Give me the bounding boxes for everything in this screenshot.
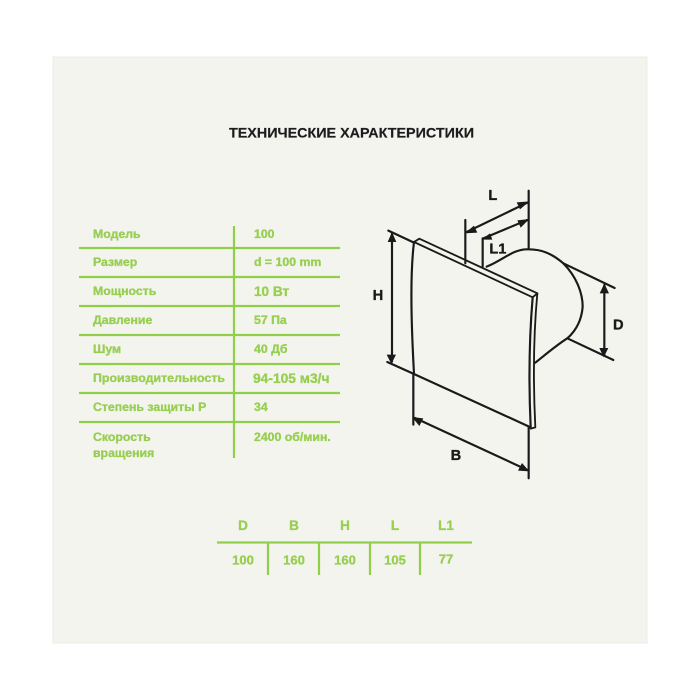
row: size [93,255,321,269]
header labels: D [238,518,248,533]
row: size: d = 100 mm [254,255,321,269]
panel: box background [53,57,647,643]
header labels: L [391,518,399,533]
row: power: Мощность [93,284,157,298]
row: model: 100 [254,227,275,241]
header labels: H [340,518,350,533]
row: model [93,227,275,241]
values: 160 [334,552,356,568]
dimension D: D [613,317,624,333]
dimension L: L [488,188,497,204]
header labels: L1 [438,518,454,533]
row: capacity: Производительность [93,371,225,385]
row: size: Размер [93,255,137,269]
header labels: B [289,518,299,533]
values: 77 [439,552,453,566]
diagram: fan dimensions [373,188,624,478]
panel: specifications table [79,226,340,460]
dimension L1: L1 [489,241,506,257]
row: rotation speed: 2400 об/мин. [254,430,331,444]
row: power: 10 Вт [254,284,290,299]
row: model: Модель [93,227,141,241]
row: rotation speed: Скорость [93,430,151,444]
row: protection rating: Степень защиты Р [93,400,206,414]
row: noise [93,342,288,356]
dimension H: H [373,288,383,304]
title: ТЕХНИЧЕСКИЕ ХАРАКТЕРИСТИКИ [229,124,474,140]
dimension B: B [451,448,461,464]
row: rotation speed: вращения [93,446,154,460]
row: pressure: 57 Па [254,313,287,327]
dimension D [563,263,624,360]
row: capacity [93,371,330,386]
row: protection rating: 34 [254,400,268,414]
row: power [93,284,290,299]
panel: dimensions table [217,518,472,575]
row: rotation speed [93,430,331,460]
row: protection rating [93,400,268,414]
dimension B [412,374,529,478]
values [232,552,453,568]
header labels [238,518,454,533]
dimension L [465,188,529,263]
fan panel [411,239,537,429]
values: 105 [384,552,406,568]
dimensions grid [217,542,472,575]
table grid [79,226,340,458]
row: noise: 40 Дб [254,342,288,356]
row: pressure [93,313,287,327]
values: 160 [283,552,305,568]
row: noise: Шум [93,342,121,356]
dimension H [373,231,414,374]
row: capacity: 94-105 м3/ч [253,371,330,386]
values: 100 [232,552,254,568]
fan housing [487,249,583,363]
dimension L1 [481,219,529,267]
row: pressure: Давление [93,313,152,327]
